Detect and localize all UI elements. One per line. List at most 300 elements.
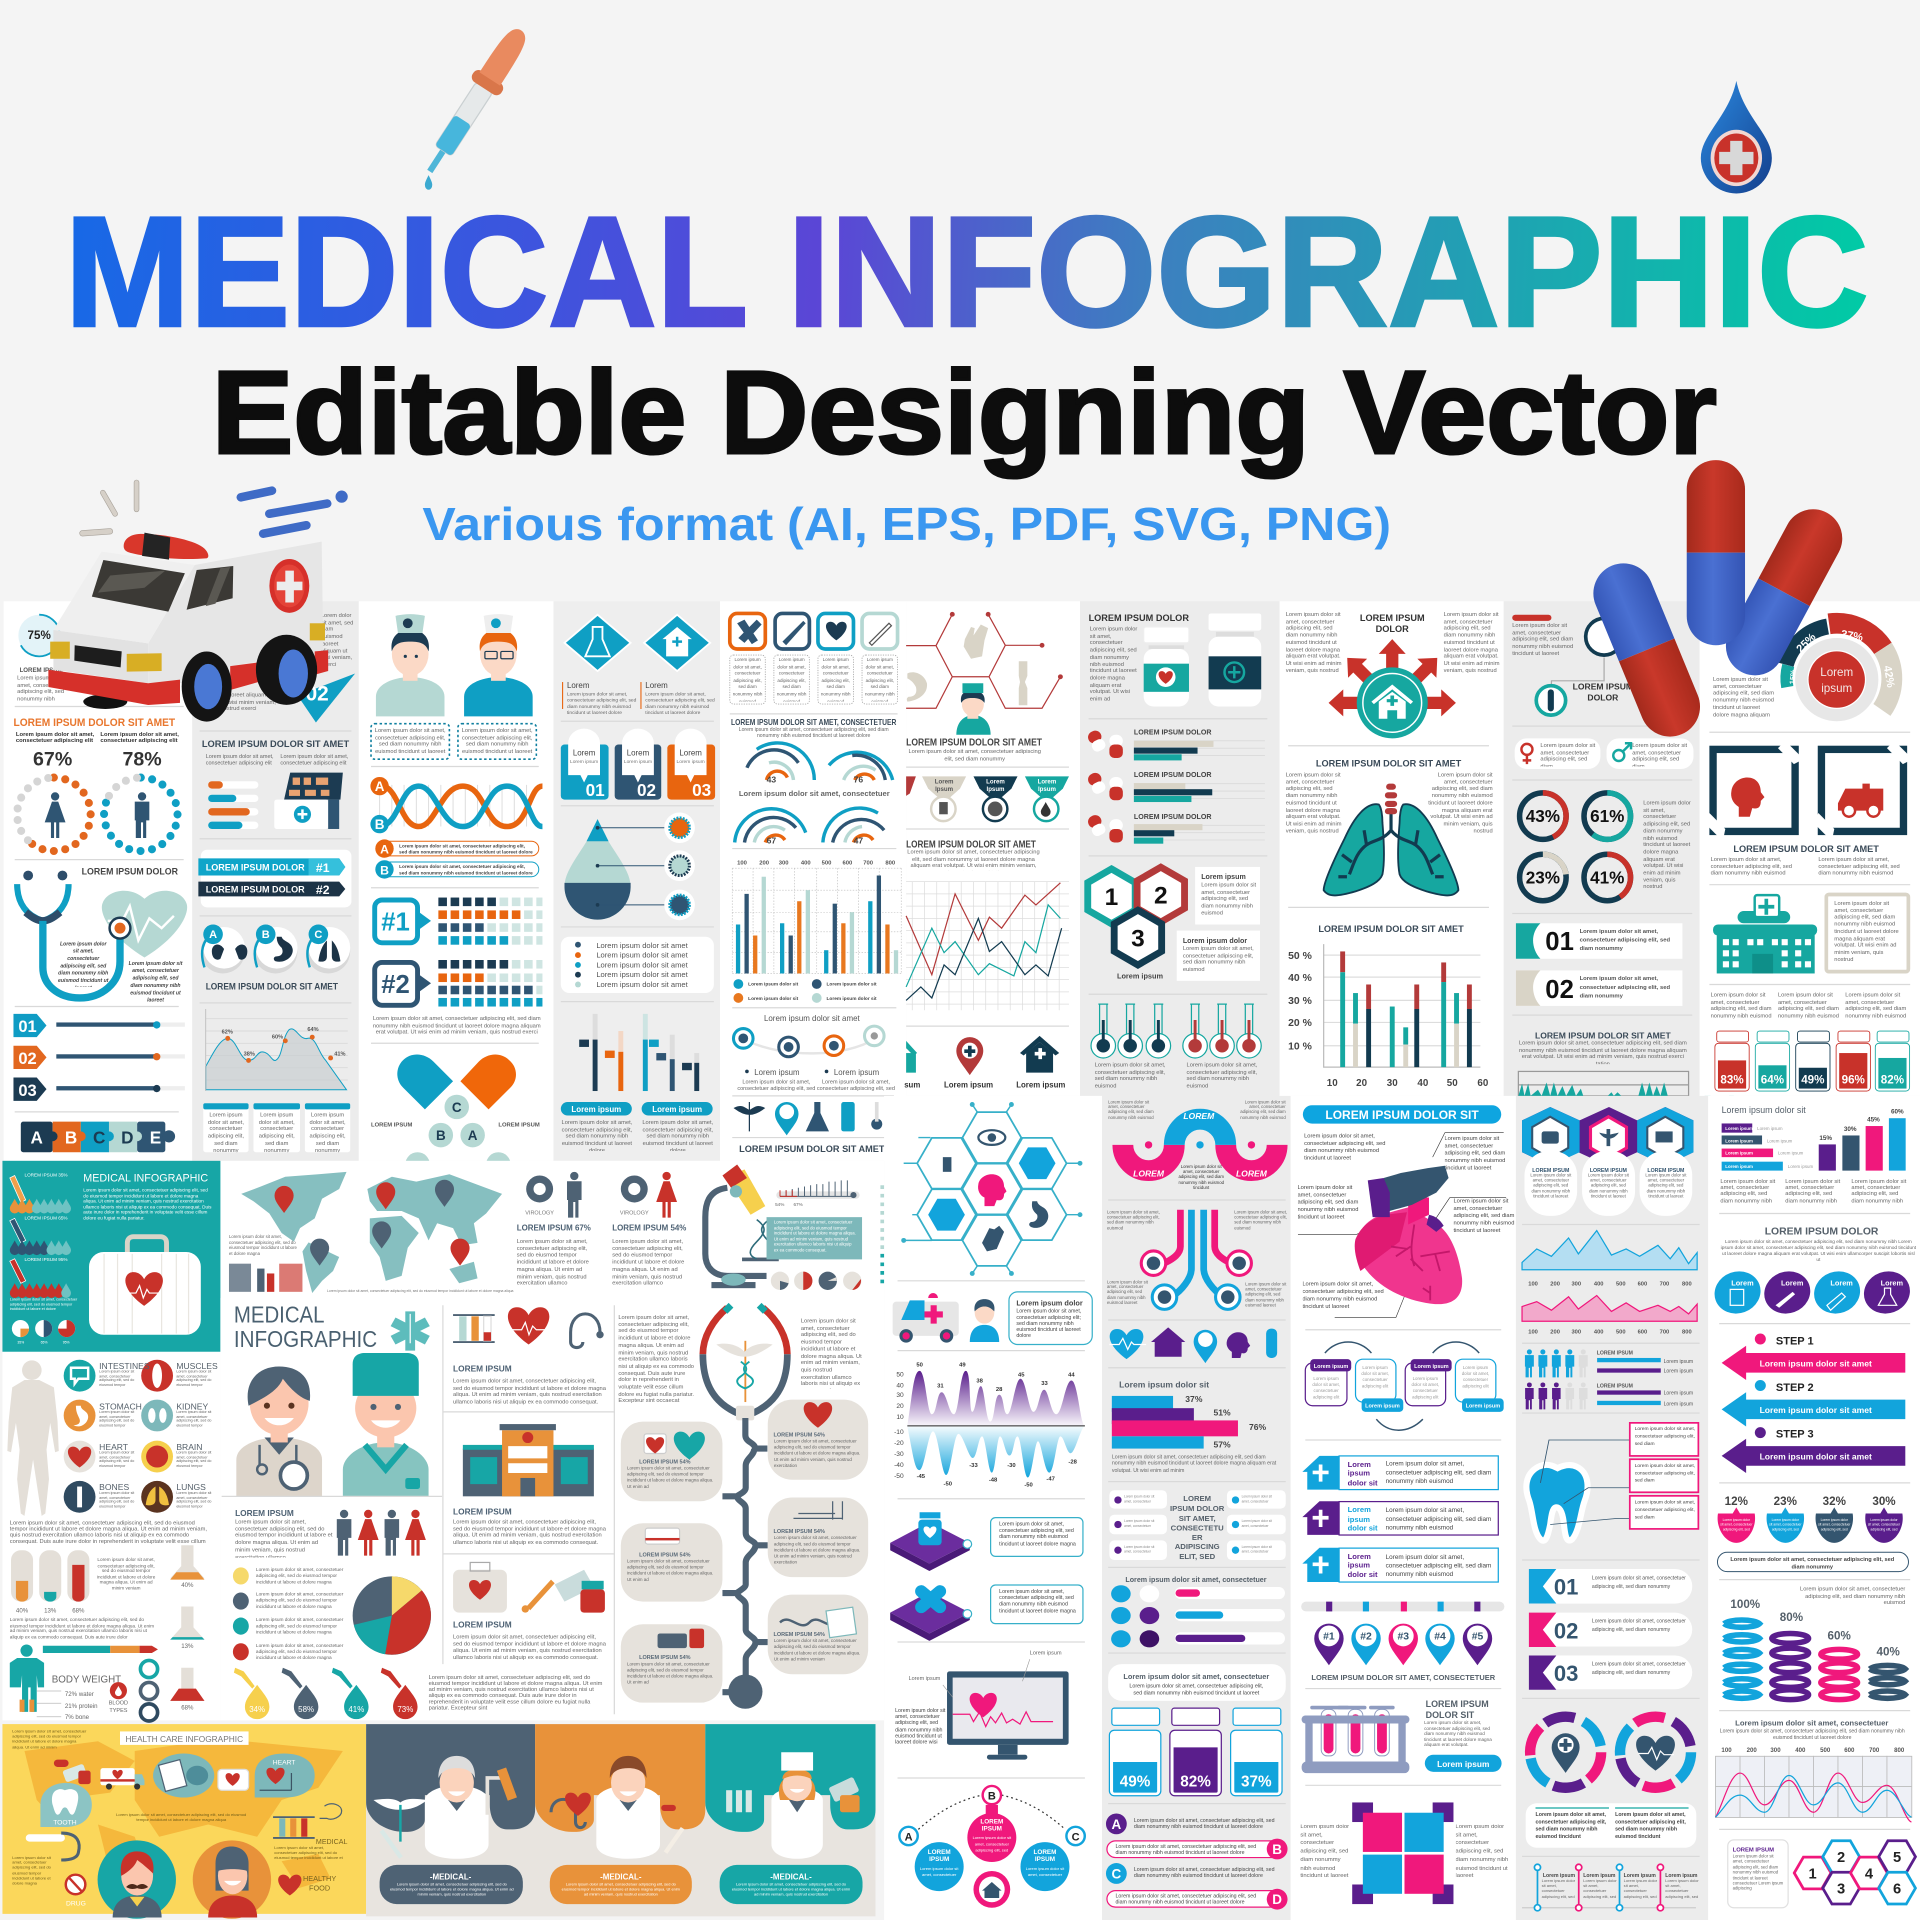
bullets: Lorem ipsum	[834, 1068, 879, 1077]
bar chart: 800	[885, 860, 896, 866]
blood types: BLOOD	[109, 1700, 128, 1706]
dashed boxes	[371, 724, 536, 759]
arch text: Lorem ipsum dolor sit amet, consectetuer adipiscing elit, sed diam nonummy nibh euismod	[1240, 1100, 1286, 1120]
percent blobs: adipiscing elit, sed	[1723, 1528, 1750, 1532]
ABC network: IPSUM	[1035, 1856, 1055, 1863]
icon bubbles	[730, 613, 898, 649]
#2 block: #2	[381, 971, 410, 999]
area chart: 41%	[334, 1052, 346, 1058]
panel: steps, stacks, curves	[1708, 1096, 1920, 1920]
legend pills: Lorem ipsum	[1778, 1151, 1804, 1156]
blue area chart: 200	[1550, 1282, 1560, 1288]
heading: LOREM IPSUM DOLOR SIT AMET	[202, 739, 350, 749]
percent bottles: 37%	[1241, 1774, 1272, 1791]
pie chart	[353, 1576, 431, 1655]
organ labels: LUNGS	[176, 1482, 206, 1492]
pin band	[1301, 1602, 1504, 1611]
organ labels	[99, 1361, 218, 1492]
blue area chart: 800	[1682, 1282, 1692, 1288]
house rows: ipsum	[1348, 1515, 1370, 1524]
people stats: LOREM IPSUM	[1597, 1350, 1633, 1356]
person	[10, 1644, 44, 1712]
body weight labels: 7% bone	[65, 1714, 90, 1721]
funnels: Lorem	[986, 779, 1005, 786]
panel: gender, donuts, numbered rows: DOLOR	[1587, 692, 1619, 702]
stacked bar chart: 40	[1417, 1078, 1429, 1089]
segmented donut: 37%	[1840, 628, 1864, 644]
vials: 82%	[1881, 1074, 1905, 1087]
text block: ut laoreet aliquam volutpat. Ut wisi minim veniam, nostrud exerci	[220, 692, 289, 712]
legend pills: Lorem ipsum	[1725, 1164, 1753, 1169]
timeline spine	[722, 1418, 768, 1692]
callout 2: Lorem ipsum dolor sit amet, consectetuer adipiscing elit, sed diam nonummy nibh euismod tincidunt ut laoreet dolore magna	[999, 1588, 1076, 1613]
labels	[371, 1123, 540, 1129]
blood types: TYPES	[109, 1708, 128, 1714]
tooth	[1526, 1465, 1588, 1541]
heart diagram text: Lorem ipsum dolor sit amet, consectetuer adipiscing elit, sed diam nonummy nibh euismod tincidunt ut laoreet	[1453, 1198, 1514, 1233]
heading: INFOGRAPHIC	[234, 1326, 377, 1352]
organ circles	[64, 1360, 173, 1513]
funnels: Ipsum	[1038, 786, 1056, 793]
timeline blobs right: LOREM IPSUM 54%	[774, 1529, 825, 1535]
triangle 02	[298, 673, 355, 722]
steps	[1722, 1333, 1905, 1473]
3D bars	[1112, 1394, 1267, 1449]
labels: LOREM IPSUM	[371, 1123, 412, 1129]
puzzle ABCDE: C	[93, 1128, 105, 1148]
male 78% ring: 78%	[122, 748, 162, 770]
monitor text: Lorem ipsum dolor sit amet, consectetuer adipiscing elit, sed diam nonummy nibh euismod tincidunt ut laoreet dolore wisi	[895, 1707, 945, 1745]
flasks: 40%	[181, 1582, 194, 1589]
tag and text: Lorem ipsum dolor sit amet, consectetuer adipiscing elit, sed diam nonummy nibh euismod tincidunt ut laoreet	[1512, 622, 1573, 656]
percent blobs: sit amet, consectetuer	[1769, 1523, 1802, 1527]
squares	[1352, 1802, 1453, 1904]
text top: Lorem dolor sit amet, sed diam euismod laoreet aliquam ut wisi veniam, exerci	[321, 612, 353, 667]
stacked bar chart: 10 %	[1288, 1041, 1312, 1052]
center label	[1170, 1494, 1225, 1561]
area chart: 60%	[272, 1034, 283, 1040]
A B C D rows: A	[1112, 1817, 1122, 1832]
lorem block + people: LOREM IPSUM	[235, 1508, 294, 1518]
A B bars: Lorem ipsum dolor sit amet, consectetuer adipiscing elit,	[399, 843, 525, 848]
funnels: Lorem	[1038, 779, 1057, 786]
ABC circles: B	[436, 1128, 446, 1143]
monitor	[947, 1671, 1069, 1760]
dashed boxes: Lorem ipsum dolor sit amet, consectetuer adipiscing elit, sed diam nonummy nibh euismod tincidunt ut laoreet	[462, 727, 533, 754]
flow text: adipiscing elit	[1313, 1394, 1340, 1399]
hex numbers	[1088, 867, 1185, 965]
hex cards: Lorem ipsum dolor sit amet, consectetuer adipiscing elit, sed diam nonummy nibh tincidunt ut laoreet	[1645, 1173, 1686, 1199]
heart	[102, 891, 187, 958]
panel: bubble icons and bar chart	[720, 601, 906, 1161]
virology female: VIROLOGY	[620, 1211, 649, 1217]
diamond house	[644, 615, 710, 671]
panel: donut, frames, hospital, vials: LOREM IPSUM DOLOR SIT AMET	[1733, 844, 1879, 854]
blue area chart: 600	[1638, 1282, 1647, 1288]
hex numbers: 3	[1131, 926, 1145, 953]
numbered hexes: 1	[1809, 1866, 1817, 1882]
pipe text	[1107, 1210, 1288, 1316]
caption and pies: 65%	[41, 1340, 47, 1344]
colour droppers: 58%	[298, 1705, 314, 1714]
slate caption	[380, 1865, 523, 1904]
hex cards: LOREM IPSUM	[1590, 1168, 1628, 1174]
organ circles: C	[314, 929, 322, 941]
ovals	[1709, 1265, 1916, 1320]
house rows: dolor sit	[1348, 1478, 1378, 1487]
panel: steps, stacks, curves: Lorem ipsum dolor sit amet, consectetuer	[1735, 1718, 1888, 1727]
ABC network: IPSUM	[982, 1826, 1002, 1833]
five pins: #4	[1434, 1632, 1446, 1643]
panel: donut, frames, hospital, vials: Lorem ipsum dolor sit amet, consectetuer adipiscing elit, sed diam nonummy nibh euismod	[1711, 856, 1792, 876]
five pins: #5	[1472, 1632, 1483, 1643]
two columns box: Lorem ipsum dolor sit amet, consectetuer adipiscing elit, sed diam nonummy nibh euismod tincidunt	[1536, 1811, 1606, 1839]
center label: CONSECTETU	[1171, 1524, 1224, 1533]
percent blobs	[1718, 1495, 1903, 1543]
callout	[1009, 1292, 1092, 1344]
legend: Lorem ipsum dolor sit	[827, 996, 877, 1002]
wave chart: -30	[1007, 1463, 1016, 1469]
organ labels: STOMACH	[99, 1401, 142, 1411]
lung text: Lorem ipsum dolor sit amet, consectetuer adipiscing elit, sed diam nonummy nibh euismod tincidunt ut laoreet dolore magna aliquam erat volutpat. Ut wisi enim ad minim veniam, quis nostrud	[1286, 771, 1342, 833]
timeline stems: Lorem ipsum dolor sit amet, consectetuer adipiscing elit, sed	[1542, 1878, 1575, 1899]
panel: diamonds and bacteria	[553, 601, 720, 1161]
timeline blobs left: Lorem ipsum dolor sit amet, consectetuer adipiscing elit, sed do eiusmod tempor incididunt ut labore et dolore magna aliqua. Ut enim ad	[627, 1559, 713, 1582]
small boxes: Lorem ipsum dolor sit	[1124, 1495, 1155, 1499]
monitor text	[895, 1650, 1062, 1758]
steps: Lorem ipsum dolor sit amet	[1760, 1452, 1872, 1462]
flow diagram: Lorem ipsum	[1365, 1404, 1400, 1410]
numbered pills: Lorem ipsum dolor sit amet, consectetuer adipiscing elit, sed diam nonummy	[1592, 1575, 1686, 1589]
hex cards: LOREM IPSUM	[1532, 1168, 1570, 1174]
hex cards: Lorem ipsum dolor sit amet, consectetuer adipiscing elit, sed diam nonummy nibh tincidunt ut laoreet	[1588, 1173, 1629, 1199]
woman avatar	[193, 1840, 271, 1919]
timeline blobs right: Lorem ipsum dolor sit amet, consectetuer adipiscing elit, sed do eiusmod tempor incididunt ut labore et dolore magna aliqua. Ut enim ad minim veniam, quis nostrud exercitation	[774, 1536, 860, 1565]
organ labels: INTESTINES	[99, 1361, 150, 1371]
stethoscope: Lorem ipsum dolor sit amet, consectetuer adipiscing elit, sed do eiusmod tempor incididunt ut labore et dolore magna	[12, 1855, 51, 1886]
bar chart: 100	[737, 860, 748, 866]
five pins: #1	[1323, 1632, 1335, 1643]
panel: arches, tubes, bars, bottles: Lorem ipsum dolor sit	[1119, 1379, 1209, 1389]
wave chart: -30	[894, 1451, 904, 1458]
funnels: Ipsum	[935, 786, 954, 793]
ring icons	[1536, 618, 1622, 715]
blue header pill	[1303, 1105, 1501, 1124]
DNA helix: B	[375, 817, 385, 832]
arch text: Lorem ipsum dolor sit amet, consectetuer adipiscing elit, sed diam nonummy nibh euismod	[1108, 1100, 1154, 1120]
house rows: dolor sit	[1348, 1570, 1378, 1579]
blue header pill: LOREM IPSUM DOLOR SIT	[1325, 1108, 1479, 1122]
numbered pills: 01	[1554, 1574, 1578, 1599]
test tubes	[11, 1550, 89, 1615]
A B C D rows: diam nonummy nibh euismod tincidunt ut laoreet dolore	[1134, 1824, 1263, 1830]
flow text: consectetuer	[1314, 1388, 1339, 1393]
puzzle ABCDE: E	[150, 1128, 161, 1148]
panel: hexagon network and line chart	[904, 601, 1080, 1096]
panel: gender, donuts, numbered rows	[1504, 601, 1734, 1096]
house rows: consectetuer adipiscing elit, sed diam	[1386, 1562, 1491, 1569]
progress bars	[208, 781, 258, 829]
3D bars: 76%	[1249, 1422, 1267, 1432]
legend: Lorem ipsum dolor sit	[748, 996, 799, 1002]
wave chart: 31	[937, 1383, 944, 1389]
panel: human body organs: Lorem ipsum dolor sit amet, consectetuer adipiscing elit, sed do eiusmod tempor incididunt ut labore et dolore magna aliqua. Ut enim ad minim veniam	[97, 1558, 155, 1590]
bullets: consectetuer adipiscing elit, sed	[817, 1086, 895, 1092]
wave chart: -40	[894, 1462, 904, 1469]
panel: obstetrics / stethoscope	[4, 601, 192, 1161]
3D bars: 51%	[1213, 1408, 1231, 1418]
bacteria icons	[664, 812, 695, 920]
three cards: Lorem ipsum dolor sit amet, consectetuer adipiscing elit, sed diam nonummy	[208, 1112, 244, 1152]
hexagon network	[901, 1102, 1082, 1276]
panel: bubble icons and bar chart: Lorem ipsum dolor sit amet, consectetuer adipiscing elit, sed diam nonummy nibh euismod tincidunt ut laoreet dolore	[739, 726, 889, 738]
pills and captions: Lorem ipsum	[571, 1105, 621, 1114]
curve chart	[1716, 1747, 1912, 1822]
blue area chart: 100	[1528, 1282, 1538, 1288]
slate caption: -MEDICAL-	[430, 1873, 472, 1882]
curve chart: 600	[1844, 1747, 1855, 1754]
timeline blobs right: Lorem ipsum dolor sit amet, consectetuer adipiscing elit, sed do eiusmod tempor incididunt ut labore et dolore magna aliqua. Ut enim ad minim veniam	[774, 1638, 860, 1662]
stacked bar chart: 20 %	[1288, 1018, 1312, 1029]
ABC network: IPSUM	[929, 1856, 949, 1863]
tubes heart stethoscope	[453, 1307, 604, 1348]
teal text box: Lorem ipsum dolor sit amet, consectetuer adipiscing elit, sed do eiusmod tempor incididunt ut labore et dolore magna aliqua. Ut enim ad minim veniam, quis nostrud exercitation ullamco laboris nisi ut aliquip ex ea commodo consequat.	[774, 1220, 856, 1252]
note box	[1728, 1840, 1788, 1908]
doctor right	[464, 614, 533, 716]
monitor text: Lorem ipsum	[1030, 1650, 1062, 1656]
two column text	[16, 732, 179, 744]
flow text: Lorem ipsum	[1313, 1376, 1339, 1381]
tube text: LOREM IPSUM	[1426, 1699, 1489, 1709]
healthy food	[274, 1845, 348, 1896]
house rows: ipsum	[1348, 1560, 1370, 1569]
wave chart: -10	[894, 1429, 904, 1436]
flow text: dolor sit amet,	[1412, 1382, 1439, 1387]
puzzle ABCDE	[21, 1122, 175, 1152]
icon: 3D ambulance	[48, 480, 348, 722]
stethoscope	[12, 1833, 79, 1899]
two columns box: Lorem ipsum dolor sit amet, consectetuer adipiscing elit, sed diam nonummy nibh euismod tincidunt	[1615, 1811, 1686, 1839]
heading: LOREM IPSUM DOLOR SIT AMET	[906, 738, 1043, 749]
text Lorem: Lorem	[567, 681, 590, 690]
two column text: Lorem ipsum dolor sit amet,	[16, 732, 95, 738]
panel: bubble icons and bar chart: LOREM IPSUM DOLOR SIT AMET	[739, 1144, 885, 1154]
heart diagram text	[1297, 1133, 1515, 1315]
virology male: Lorem ipsum dolor sit amet, consectetuer adipiscing elit, sed do eiusmod tempor incididunt ut labore et dolore magna aliqua. Ut enim ad minim veniam, quis nostrud exercitation ullamco	[517, 1238, 589, 1286]
timeline stems: Lorem ipsum	[1665, 1873, 1698, 1879]
healthy food: Lorem ipsum dolor sit amet, consectetuer adipiscing elit, sed do eiusmod tempor incididunt ut labore et	[274, 1845, 343, 1860]
beige note	[1826, 894, 1908, 972]
slate caption: Lorem ipsum dolor sit amet, consectetuer adipiscing elit, sed do eiusmod tempor incididunt ut labore et dolore magna aliqua. Ut enim ad minim veniam, quis nostrud exercitation	[390, 1882, 514, 1897]
virology male: VIROLOGY	[525, 1211, 554, 1217]
percent blobs: 23%	[1774, 1495, 1798, 1508]
hex numbers: 2	[1154, 883, 1168, 910]
wave chart: 30	[896, 1392, 904, 1399]
cards 01 02 03: Lorem ipsum	[677, 759, 705, 765]
panel: organs and area chart: Lorem ipsum dolor sit amet,	[280, 754, 349, 760]
body weight labels	[37, 1674, 121, 1721]
flasks	[170, 1545, 204, 1711]
timeline stems: Lorem ipsum dolor sit amet, consectetuer adipiscing elit, sed	[1583, 1878, 1617, 1899]
ABC network: LOREM	[980, 1818, 1003, 1825]
panel: hexagon network and line chart: Lorem ipsum	[1016, 1080, 1065, 1089]
white boxes: Lorem ipsum dolor	[1183, 937, 1247, 945]
ABC network: amet, consectetuer	[1028, 1872, 1063, 1877]
percent blobs: Lorem ipsum dolor	[1821, 1518, 1849, 1522]
flow text: Lorem ipsum	[1413, 1376, 1438, 1381]
device icon	[274, 773, 343, 829]
thermometers row	[1118, 1004, 1261, 1058]
center label: ELIT, SED	[1179, 1552, 1216, 1561]
pink area chart: 600	[1638, 1329, 1647, 1335]
flasks: 13%	[181, 1643, 194, 1650]
panel: heart anatomy	[1291, 1096, 1516, 1920]
three cards	[203, 1103, 350, 1152]
ovals: Lorem	[1731, 1279, 1754, 1288]
bubble glyphs	[737, 620, 891, 645]
wave chart: 28	[996, 1387, 1003, 1393]
panel: steps, stacks, curves: LOREM IPSUM DOLOR	[1765, 1226, 1879, 1237]
title: MEDICAL INFOGRAPHIC: INFOGRAPHIC	[787, 185, 1869, 360]
bar chart: 600	[842, 860, 853, 866]
segmented donut: 25%	[1794, 631, 1819, 655]
house rows: nonummy nibh euismod	[1386, 1524, 1454, 1531]
flow diagram	[1305, 1342, 1504, 1430]
pink area chart: 800	[1682, 1329, 1692, 1335]
panel: donut, frames, hospital, vials: Lorem ipsum dolor sit amet, consectetuer adipiscing elit, sed diam nonummy nibh euismod	[1818, 856, 1900, 876]
row 02: consectetuer adipiscing elit, sed	[1580, 985, 1671, 991]
anatomical heart	[1355, 1166, 1462, 1304]
virology female: Lorem ipsum dolor sit amet, consectetuer adipiscing elit, sed do eiusmod tempor incididunt ut labore et dolore magna aliqua. Ut enim ad minim veniam, quis nostrud exercitation ullamco	[612, 1238, 684, 1286]
cards 01 02 03: 02	[637, 780, 656, 800]
bar rows with pills: LOREM IPSUM DOLOR	[1134, 813, 1212, 821]
numbered hexes: 5	[1893, 1850, 1901, 1866]
tooth callouts: Lorem ipsum dolor sit amet, consectetuer adipiscing elit, sed diam	[1635, 1462, 1695, 1483]
title: MEDICAL INFOGRAPHIC	[65, 185, 1869, 360]
teal caption: -MEDICAL-	[770, 1873, 812, 1882]
title: MEDICAL INFOGRAPHIC: MEDICAL	[65, 185, 748, 360]
italic caption	[58, 940, 184, 1007]
tooth bubble	[40, 1783, 92, 1827]
blue area chart: 500	[1616, 1282, 1626, 1288]
orange caption: Lorem ipsum dolor sit amet, consectetuer adipiscing elit, sed do eiusmod tempor incididunt ut labore et dolore magna aliqua. Ut enim ad minim veniam, quis nostrud exercitation	[562, 1882, 680, 1897]
organ labels: HEART	[99, 1442, 129, 1452]
flow text: adipiscing elit	[1412, 1394, 1439, 1399]
people stats: Lorem ipsum	[1664, 1359, 1693, 1365]
ring arrows	[1516, 1703, 1705, 1802]
brain bubble	[153, 1753, 214, 1798]
wave chart: -47	[1046, 1476, 1055, 1482]
panel: bottles and thermometers	[1080, 601, 1280, 1096]
timeline blobs right	[768, 1400, 868, 1674]
text Lorem: Lorem ipsum dolor sit amet, consectetuer adipiscing elit, sed diam nonummy nibh euismod tincidunt ut laoreet dolore	[567, 691, 636, 715]
center label: ER	[1192, 1533, 1203, 1542]
percent blobs: adipiscing elit, sed	[1871, 1528, 1898, 1532]
funnels: Ipsum	[987, 786, 1005, 793]
panel: heart anatomy: LOREM IPSUM DOLOR SIT AMET, CONSECTETUER	[1311, 1674, 1495, 1682]
drop chart	[564, 819, 665, 920]
line chart	[906, 882, 1069, 1010]
arches: LOREM	[1183, 1111, 1215, 1121]
doctor with stethoscope	[236, 1367, 322, 1496]
ambulance icon	[893, 1293, 959, 1343]
people stats: LOREM IPSUM	[1597, 1383, 1633, 1389]
drug icon: DRUG	[66, 1900, 86, 1907]
icons house pin	[906, 1036, 1059, 1075]
panel: medical infographic doctors: LOREM IPSUM	[453, 1619, 512, 1629]
house rows: nonummy nibh euismod	[1386, 1571, 1454, 1578]
pipe text: Lorem ipsum dolor sit amet, consectetuer adipiscing elit, sed diam nonummy nibh euismod laoreet	[1245, 1282, 1286, 1308]
panel: human body organs	[2, 1352, 220, 1721]
virology male: LOREM IPSUM 67%	[517, 1224, 591, 1233]
house rows: Lorem ipsum dolor sit amet,	[1386, 1554, 1464, 1561]
panel: bottles and thermometers: Lorem ipsum	[1117, 971, 1163, 980]
stacked bar chart: 10	[1327, 1078, 1338, 1089]
three texts: Lorem ipsum dolor sit amet, consectetuer adipiscing elit, sed diam nonummy nibh	[1851, 1178, 1906, 1203]
timeline stethoscope	[703, 1305, 787, 1420]
stacked bar chart: 20	[1356, 1078, 1368, 1089]
panel: bubble icons and bar chart: Lorem ipsum dolor sit amet	[764, 1014, 860, 1023]
heart diagram text: Lorem ipsum dolor sit amet, consectetuer adipiscing elit, sed diam nonummy nibh euismod tincidunt ut laoreet	[1302, 1281, 1384, 1309]
percent blobs: sit amet, consectetuer	[1720, 1523, 1753, 1527]
panel: health care yellow map: Lorem ipsum dolor sit amet, consectetuer adipiscing elit, sed do eiusmod tempor incididunt ut labore et dolore magna aliqua. Ut enim ad minim	[12, 1729, 86, 1749]
teal poster	[705, 1724, 876, 1859]
flow text: Lorem ipsum	[1362, 1365, 1388, 1370]
heading: MEDICAL	[234, 1301, 325, 1327]
percent donuts: 41%	[1590, 868, 1624, 888]
numbered hexes: 6	[1893, 1881, 1901, 1897]
squares text	[1300, 1824, 1509, 1883]
body weight labels: 21% protein	[65, 1703, 98, 1710]
caption and pies	[10, 1298, 83, 1344]
thermometer	[1091, 1004, 1116, 1058]
wave chart: 33	[1041, 1381, 1048, 1387]
bottles	[1144, 613, 1261, 707]
center label: LOREM	[1183, 1494, 1211, 1503]
five pins	[1314, 1624, 1492, 1665]
orange poster	[535, 1724, 705, 1859]
thermometer chart: 54%	[775, 1202, 784, 1207]
A B C D rows: Lorem ipsum dolor sit amet, consectetuer adipiscing elit, sed	[1134, 1818, 1275, 1824]
callout 1	[991, 1518, 1083, 1556]
ABC network: A	[905, 1831, 913, 1843]
house rows: nonummy nibh euismod	[1386, 1478, 1454, 1485]
people stats: Lorem ipsum	[1664, 1391, 1693, 1397]
numbered hexes: 4	[1865, 1866, 1874, 1882]
three text columns	[1711, 992, 1907, 1021]
outlined pill: diam nonummy	[1791, 1565, 1834, 1571]
ABC network: Lorem ipsum dolor sit	[920, 1866, 959, 1871]
nurse	[970, 1299, 999, 1342]
caption and pies: 35%	[17, 1340, 24, 1344]
icon: capsule centre	[1687, 460, 1745, 645]
ABC network	[899, 1786, 1085, 1908]
numbered hexes: 2	[1837, 1850, 1845, 1866]
row 02: diam nonummy	[1580, 993, 1624, 999]
A B bars	[375, 839, 539, 879]
75% gauge: 75%	[28, 629, 51, 642]
panel: medical infographic doctors: Lorem ipsum dolor sit amet, consectetuer adipiscing elit, sed do eiusmod tempor incididunt ut labore et dolore magna aliqua. Ut enim ad minim veniam, quis nostrud exercitation ullamco laboris nisi ut aliquip ex ea commodo consequat.	[453, 1518, 606, 1545]
vials: 83%	[1720, 1074, 1744, 1087]
small boxes: amet, consectetuer	[1124, 1499, 1151, 1503]
ovals: Lorem	[1881, 1279, 1904, 1288]
orange caption	[550, 1865, 692, 1904]
flow diagram: Lorem ipsum	[1414, 1364, 1449, 1370]
panel: teal medical suitcase: MEDICAL INFOGRAPHIC	[83, 1173, 208, 1185]
syringe stats	[10, 1173, 71, 1298]
healthy food: FOOD	[309, 1884, 330, 1893]
curve chart: 300	[1770, 1747, 1781, 1754]
